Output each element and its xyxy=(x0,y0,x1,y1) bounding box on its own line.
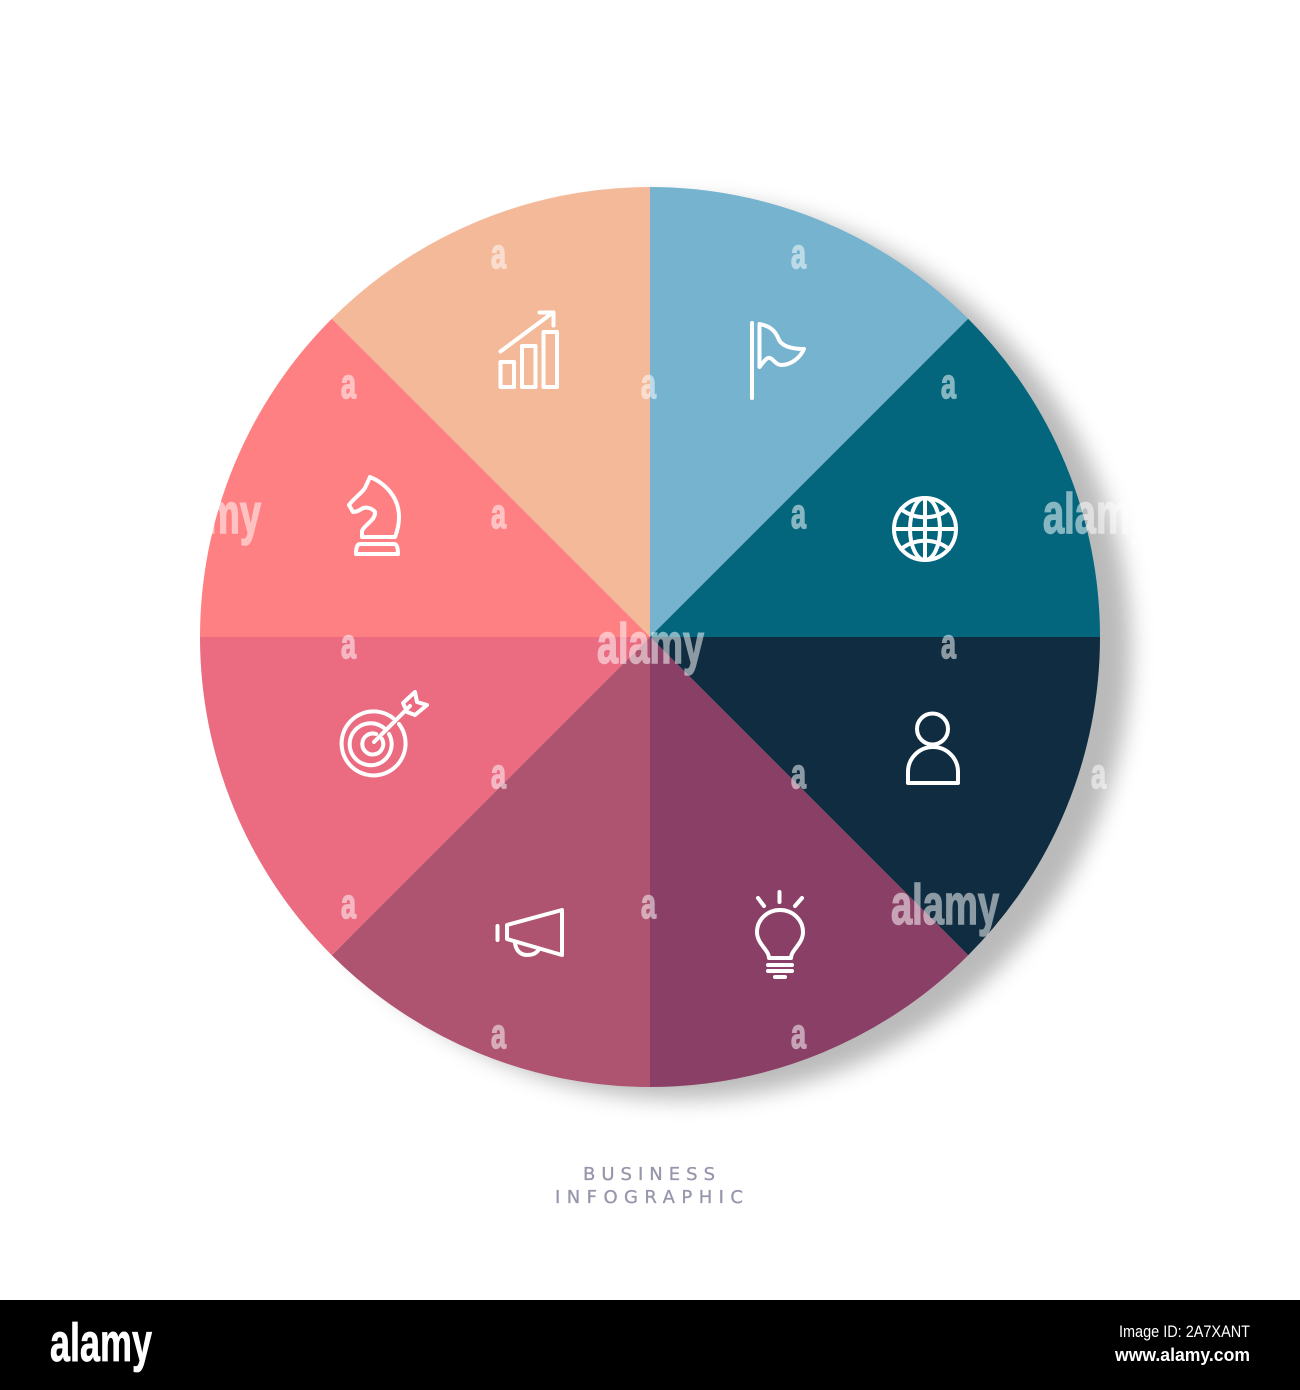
small watermark letters: a xyxy=(491,1010,506,1057)
small watermark letters: a xyxy=(491,230,506,277)
title line 1: BUSINESS xyxy=(583,1164,715,1185)
small watermark letters: a xyxy=(1091,750,1106,797)
title line 2: INFOGRAPHIC xyxy=(555,1187,743,1208)
small watermark letters xyxy=(341,230,1106,1057)
small watermark letters: a xyxy=(941,620,956,667)
segment: pink xyxy=(200,637,650,955)
small watermark letters: a xyxy=(491,750,506,797)
small watermark letters: a xyxy=(341,360,356,407)
title: business infographic xyxy=(555,1164,743,1208)
icon: flag xyxy=(752,323,804,398)
small watermark letters: a xyxy=(791,750,806,797)
icon: growth chart xyxy=(500,312,557,387)
watermarks xyxy=(153,230,1151,1057)
image id: Image ID: 2A7XANT xyxy=(1119,1322,1250,1341)
icon: person xyxy=(908,714,958,783)
lower right watermark: alamy xyxy=(891,873,999,937)
left watermark: alamy xyxy=(153,482,261,546)
segment: plum xyxy=(650,637,968,1087)
segment: rose xyxy=(332,637,650,1087)
icon: light bulb xyxy=(757,892,803,977)
small watermark letters: a xyxy=(491,490,506,537)
small watermark letters: a xyxy=(641,880,656,927)
footer bar xyxy=(0,1300,1300,1390)
segment: sky blue xyxy=(650,187,968,637)
circle drop shadow xyxy=(233,201,1131,1099)
segment: coral xyxy=(200,319,650,637)
small watermark letters: a xyxy=(641,360,656,407)
small watermark letters: a xyxy=(791,490,806,537)
small watermark letters: a xyxy=(791,1010,806,1057)
small watermark letters: a xyxy=(341,880,356,927)
small watermark letters: a xyxy=(941,360,956,407)
website: www.alamy.com xyxy=(1114,1345,1250,1365)
right watermark: alamy xyxy=(1043,482,1151,546)
icon: target with arrow xyxy=(342,692,427,775)
segment: navy xyxy=(650,637,1100,955)
segment: peach xyxy=(332,187,650,637)
small watermark letters: a xyxy=(341,620,356,667)
icon: globe xyxy=(894,498,956,560)
icon: megaphone xyxy=(498,910,562,955)
footer logo: alamy xyxy=(50,1313,152,1373)
pie chart xyxy=(200,187,1100,1087)
segment: teal xyxy=(650,319,1100,637)
center watermark: alamy xyxy=(597,612,704,676)
icon: chess knight xyxy=(349,477,399,554)
small watermark letters: a xyxy=(791,230,806,277)
